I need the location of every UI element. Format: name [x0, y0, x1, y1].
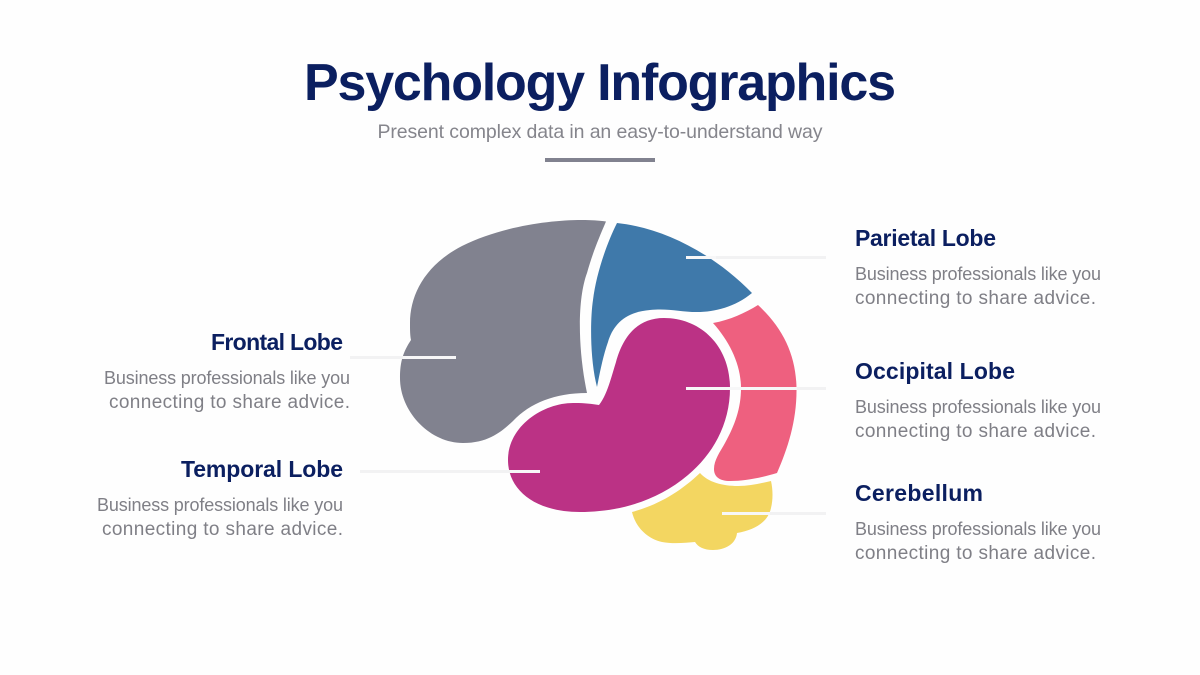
title underline	[545, 158, 655, 162]
label: occipital lobe	[855, 358, 1101, 442]
frontal lobe shape	[400, 220, 606, 443]
title: Psychology Infographics	[304, 54, 896, 112]
cerebellum shape	[632, 473, 772, 550]
label: cerebellum	[855, 480, 1101, 564]
label: occipital lobe: connecting to share advice.	[855, 421, 1096, 442]
parietal lobe leader line	[686, 256, 826, 259]
frontal lobe leader line	[350, 356, 456, 359]
label: occipital lobe: Occipital Lobe	[855, 358, 1015, 384]
parietal lobe shape	[591, 223, 752, 387]
label: occipital lobe: Business professionals like you	[855, 397, 1101, 417]
label: temporal lobe	[97, 456, 343, 540]
label: frontal lobe: Frontal Lobe	[211, 329, 343, 355]
label: temporal lobe: connecting to share advice.	[102, 519, 343, 540]
label: cerebellum: Business professionals like you	[855, 519, 1101, 539]
temporal lobe leader line	[360, 470, 540, 473]
label: temporal lobe: Business professionals like you	[97, 495, 343, 515]
occipital lobe shape	[713, 305, 797, 481]
label: frontal lobe	[104, 329, 350, 413]
label: frontal lobe: connecting to share advice.	[109, 392, 350, 413]
label: frontal lobe: Business professionals like you	[104, 368, 350, 388]
label: parietal lobe: Parietal Lobe	[855, 225, 996, 251]
occipital lobe leader line	[686, 387, 826, 390]
cerebellum leader line	[722, 512, 826, 515]
label: cerebellum: Cerebellum	[855, 480, 983, 506]
label: temporal lobe: Temporal Lobe	[181, 456, 343, 482]
label: parietal lobe	[855, 225, 1101, 309]
subtitle: Present complex data in an easy-to-understand way	[378, 121, 823, 143]
temporal lobe shape	[508, 318, 730, 512]
brain diagram	[350, 220, 826, 550]
label: parietal lobe: Business professionals like you	[855, 264, 1101, 284]
label: parietal lobe: connecting to share advice.	[855, 288, 1096, 309]
label: cerebellum: connecting to share advice.	[855, 543, 1096, 564]
